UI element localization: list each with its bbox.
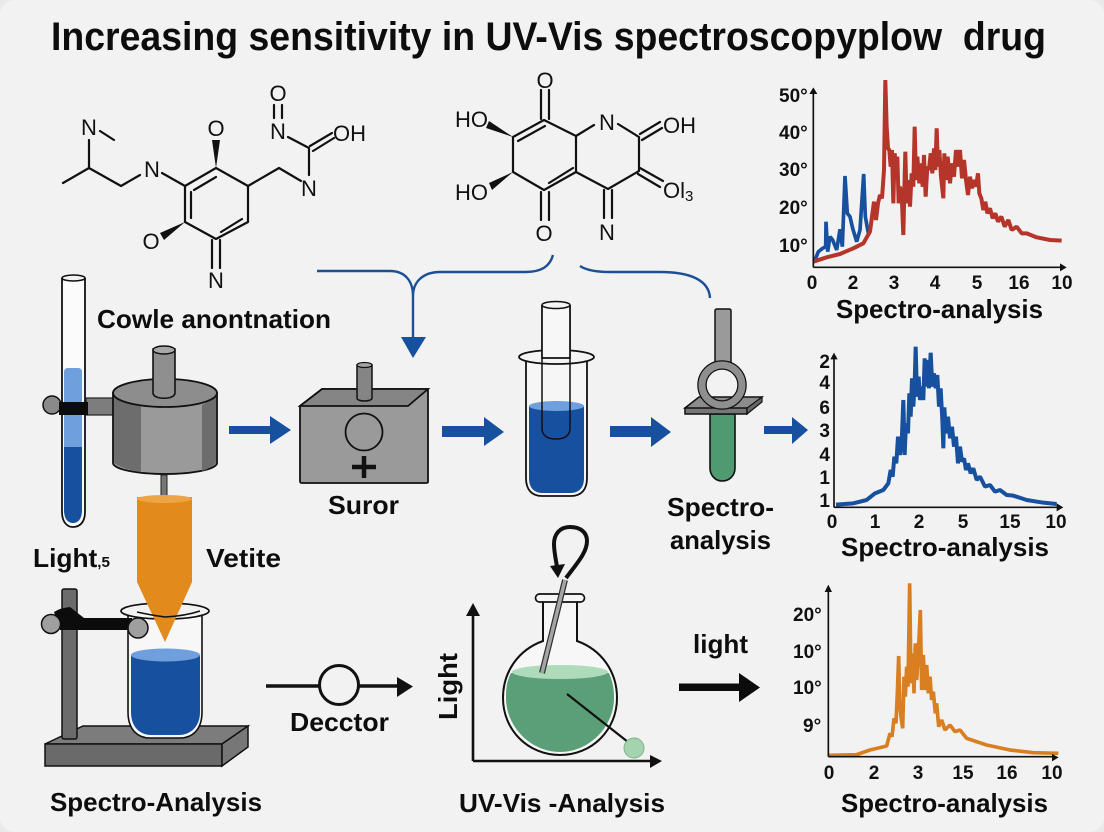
label: Suror: Suror: [328, 490, 399, 520]
icon: cuvette with blue liquid: [519, 302, 594, 496]
molecule: right structure: OH: [663, 113, 696, 138]
icon: retort stand with beaker and orange light beam: [42, 495, 248, 766]
label: Spectro-Analysis: Spectro-Analysis: [50, 787, 262, 817]
chart: top spectrum with red and blue traces: 16: [1008, 273, 1030, 294]
molecule: right structure: HO: [455, 107, 488, 132]
label: UV-Vis -Analysis: UV-Vis -Analysis: [459, 788, 665, 818]
label: rotated Light axis: Light: [433, 653, 463, 720]
label: Vetite: Vetite: [206, 543, 281, 573]
molecule: right structure: O: [535, 221, 553, 246]
molecule: left structure: O: [269, 81, 287, 106]
chart: top spectrum with red and blue traces: 10: [1051, 273, 1073, 294]
arrow: blue arrow 1: [229, 416, 291, 444]
label: Spectro-analysis two lines: analysis: [670, 525, 771, 555]
chart: bottom orange spectrum: 16: [996, 763, 1018, 784]
chart: top spectrum with red and blue traces: [779, 80, 1073, 324]
chart: bottom orange spectrum: 15: [952, 763, 974, 784]
chart: bottom orange spectrum: 10°: [793, 642, 822, 663]
chart: top spectrum with red and blue traces: 10°: [779, 236, 808, 257]
chart: top spectrum with red and blue traces: 50°: [779, 86, 808, 107]
arrow: blue arrow 4: [764, 417, 808, 444]
label: Decctor: Decctor: [290, 707, 389, 737]
chart: bottom orange spectrum: [793, 583, 1063, 818]
chart: middle blue spectrum: 4: [819, 373, 830, 394]
molecule: right structure: O: [536, 68, 554, 93]
chart: top spectrum with red and blue traces: Spectro-analysis: [836, 294, 1043, 324]
icon: holder with green tube: [685, 309, 762, 481]
chart: middle blue spectrum: 2: [819, 352, 830, 373]
molecule: right structure: HO: [455, 180, 488, 205]
label: Spectro-analysis two lines: [667, 492, 774, 555]
chart: top spectrum with red and blue traces: 5: [972, 273, 983, 294]
chart: middle blue spectrum: 6: [819, 398, 830, 419]
icon: column clamp and cylinder: [43, 346, 217, 499]
chart: bottom orange spectrum: 3: [913, 763, 923, 784]
molecule: left structure: O: [207, 116, 225, 141]
chart: top spectrum with red and blue traces: 4: [930, 273, 941, 294]
chart: middle blue spectrum: 15: [999, 512, 1021, 533]
arrow: blue arrow 2: [442, 417, 504, 446]
molecule: right structure: Ol: [663, 178, 685, 203]
chart: middle blue spectrum: 3: [819, 421, 830, 442]
chart: middle blue spectrum: 5: [958, 512, 969, 533]
chart: middle blue spectrum: 0: [827, 512, 837, 533]
chart: top spectrum with red and blue traces: 2: [848, 273, 858, 294]
molecule: right structure: N: [599, 110, 615, 135]
molecule: left structure: OH: [333, 121, 366, 146]
label: Cowle anontnation: Cowle anontnation: [97, 304, 331, 334]
molecule: left structure: N: [81, 115, 97, 140]
chart: middle blue spectrum: 2: [914, 512, 924, 533]
molecule: left structure: [63, 81, 366, 293]
arrow: blue arrow 3: [610, 417, 671, 447]
icon: flask on axes with stirring rod: [466, 527, 662, 768]
chart: top spectrum with red and blue traces: 3: [889, 273, 899, 294]
chart: bottom orange spectrum: 10°: [793, 678, 822, 699]
title: Increasing sensitivity in UV-Vis spectroscopyplow drug: [51, 15, 1046, 59]
chart: middle blue spectrum: Spectro-analysis: [841, 532, 1049, 562]
chart: top spectrum with red and blue traces: 0: [807, 273, 817, 294]
chart: top spectrum with red and blue traces: 40°: [779, 123, 808, 144]
chart: bottom orange spectrum: 2: [869, 763, 879, 784]
molecule: right structure: N: [599, 220, 615, 245]
icon: sample box with detector: [300, 362, 428, 483]
molecule: left structure: N: [270, 119, 286, 144]
chart: bottom orange spectrum: 0: [824, 763, 834, 784]
chart: bottom orange spectrum: Spectro-analysis: [841, 788, 1048, 818]
icon: tall test tube: [62, 275, 85, 527]
label: light: light: [693, 629, 748, 659]
icon: detector line with circle and arrow: [266, 666, 413, 704]
molecule: left structure: O: [142, 229, 160, 254]
chart: middle blue spectrum: 4: [819, 445, 830, 466]
chart: bottom orange spectrum: 10: [1041, 763, 1063, 784]
chart: middle blue spectrum: 1: [870, 512, 881, 533]
molecule: left structure: N: [144, 157, 160, 182]
chart: middle blue spectrum: 1: [819, 468, 830, 489]
chart: top spectrum with red and blue traces: 30°: [779, 160, 808, 181]
molecule: left structure: N: [301, 176, 317, 201]
chart: bottom orange spectrum: 9°: [803, 716, 821, 737]
chart: middle blue spectrum: 1: [819, 491, 830, 512]
label: Light with subscript: Light,5: [33, 543, 110, 573]
chart: middle blue spectrum: [819, 347, 1067, 562]
chart: top spectrum with red and blue traces: 20°: [779, 198, 808, 219]
chart: bottom orange spectrum: 20°: [793, 605, 822, 626]
label: Spectro-analysis two lines: Spectro-: [667, 492, 774, 522]
molecule: right structure: 3: [685, 188, 693, 205]
chart: middle blue spectrum: 10: [1045, 512, 1067, 533]
arrow: blue merging connector: [317, 255, 710, 358]
molecule: left structure: N: [208, 268, 224, 293]
molecule: right structure: [455, 68, 696, 246]
arrow: black arrow: [679, 673, 760, 702]
